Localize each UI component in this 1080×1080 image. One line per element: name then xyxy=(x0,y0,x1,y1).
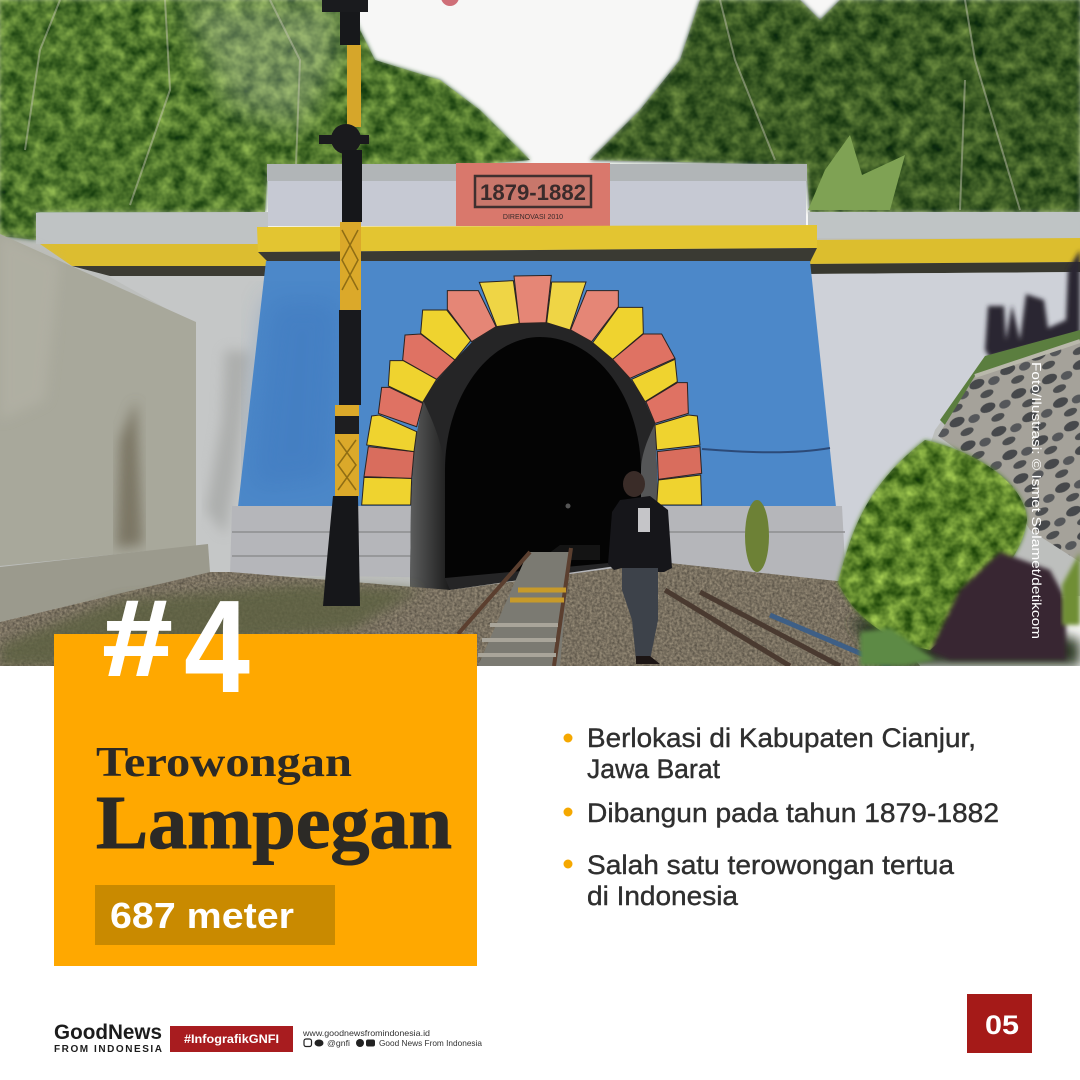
ground and gravel xyxy=(0,562,920,666)
bullet: location xyxy=(564,723,976,784)
length tag: 687 meter xyxy=(110,895,294,936)
painted brick arch xyxy=(362,275,702,505)
footer logo xyxy=(54,1021,162,1055)
page number xyxy=(967,994,1032,1053)
tunnel arch xyxy=(410,323,658,590)
lower right ground shade xyxy=(850,610,1080,666)
heading large: Lampegan xyxy=(96,781,452,865)
tunnel portal top parapet xyxy=(267,164,807,226)
trees: left forest xyxy=(0,0,530,240)
footer logo: FROM INDONESIA xyxy=(54,1044,162,1055)
date plaque 1879-1882: DIRENOVASI 2010 xyxy=(503,214,563,221)
photo: Lampegan tunnel portal xyxy=(0,0,1080,666)
social links xyxy=(302,1028,482,1048)
purple bush and foreground plants xyxy=(860,552,1080,666)
grass strip above retaining wall xyxy=(940,330,1080,425)
green bush xyxy=(838,440,1027,650)
cobblestone retaining wall xyxy=(938,341,1080,562)
bullet: location: Berlokasi di Kabupaten Cianjur, xyxy=(587,723,976,753)
dark ornamental plants xyxy=(985,250,1080,358)
photo credit: Foto/Ilustrasi: © Ismet Selamet/detikcom xyxy=(1029,362,1043,639)
concrete plinth xyxy=(230,506,846,582)
bullet: oldest tunnels: di Indonesia xyxy=(587,881,739,911)
railway tracks xyxy=(458,548,890,666)
yellow cornice beam xyxy=(257,225,817,262)
trees: right forest xyxy=(590,0,1080,212)
small shrub by portal xyxy=(745,500,769,572)
icon: twitter xyxy=(314,1040,324,1046)
bullet list xyxy=(564,723,999,911)
bullet: oldest tunnels: Salah satu terowongan tertua xyxy=(587,850,955,880)
tree trunks xyxy=(25,0,1020,210)
number badge xyxy=(103,573,250,720)
pink marker at top edge xyxy=(441,0,459,6)
blue portal wall xyxy=(238,261,836,507)
social links: www.goodnewsfromindonesia.id xyxy=(302,1028,430,1038)
right side wing wall xyxy=(808,212,1080,590)
social links: @gnfi xyxy=(327,1038,350,1048)
bullet: oldest tunnels xyxy=(564,850,955,911)
bullet: location: Jawa Barat xyxy=(587,754,720,784)
icon: instagram xyxy=(304,1039,312,1046)
footer logo: GoodNews xyxy=(54,1021,162,1044)
wall backdrop xyxy=(0,236,1080,596)
number badge: 4 xyxy=(184,573,250,720)
icon: youtube xyxy=(366,1040,375,1046)
heading small: Terowongan xyxy=(96,740,352,786)
panel: title card xyxy=(54,573,477,966)
signal post xyxy=(319,0,369,606)
concrete left retaining wall xyxy=(0,234,210,622)
page number: 05 xyxy=(985,1010,1019,1040)
hashtag badge: #InfografikGNFI xyxy=(184,1034,279,1046)
icon: facebook xyxy=(356,1039,364,1047)
person walking into the tunnel xyxy=(608,471,672,664)
length tag xyxy=(95,885,335,945)
date plaque 1879-1882 xyxy=(456,163,610,226)
social links: Good News From Indonesia xyxy=(379,1038,482,1048)
sky xyxy=(268,0,1080,634)
date plaque 1879-1882: 1879-1882 xyxy=(480,180,586,205)
bullet: construction years: Dibangun pada tahun 1879-1882 xyxy=(587,798,999,828)
number badge: # xyxy=(103,577,172,698)
left side wing wall xyxy=(36,212,268,580)
hashtag badge xyxy=(170,1026,293,1052)
